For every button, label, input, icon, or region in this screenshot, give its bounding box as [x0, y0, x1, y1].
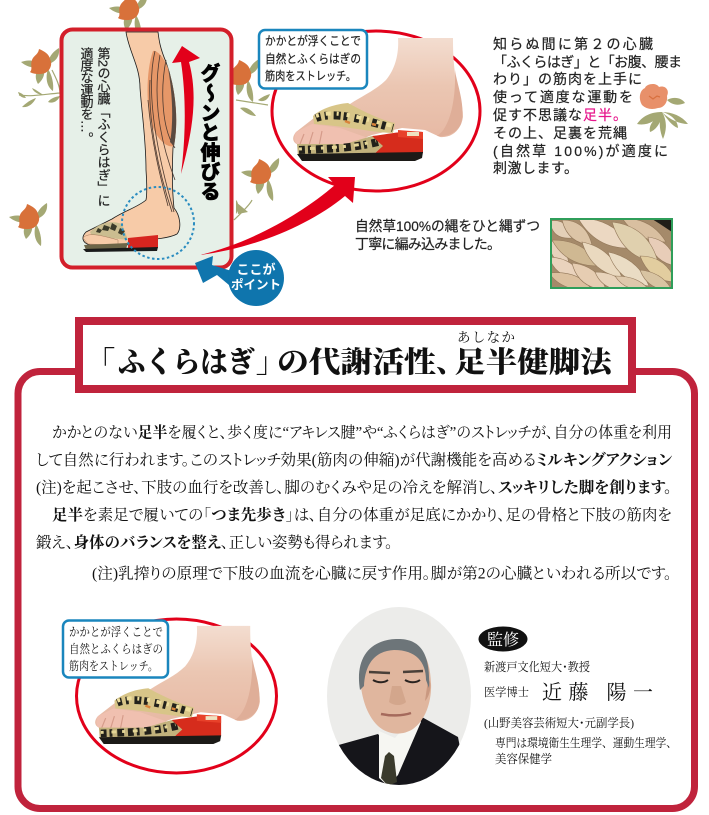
text: supervisor profile: (山野美容芸術短大･元副学長): [484, 715, 634, 730]
text: supervisor profile: [484, 659, 677, 766]
big red arrow: [200, 177, 355, 255]
callout: stretch lower: かかとが浮くことで: [69, 625, 163, 639]
vertical caption: 第2の心臓「ふくらはぎ」に: [96, 46, 110, 207]
red stretch arrow: [172, 46, 200, 174]
decorative flowers: [9, 0, 279, 246]
text block: intro: その上、足裏を荒縄: [493, 125, 627, 141]
leg illustration: [83, 32, 180, 252]
text block: intro: 刺激します。: [493, 160, 578, 176]
text: supervisor profile: 美容保健学: [495, 751, 552, 766]
text block: intro: [493, 36, 682, 176]
vertical caption: [78, 46, 110, 207]
text: rope caption: 丁寧に編み込みました。: [355, 236, 501, 252]
heading banner: 足半健脚法: [454, 346, 616, 379]
callout: stretch lower: 筋肉をストレッチ。: [69, 659, 158, 673]
heading banner: あしなか: [457, 330, 515, 345]
text block: intro: 知らぬ間に第２の心臓: [493, 36, 653, 52]
text: supervisor profile: 近藤 陽一: [542, 681, 653, 704]
dotted circle highlight: [122, 187, 194, 259]
body text: して自然に行われます。このストレッチ効果(筋肉の伸縮)が代謝機能を高めるミルキングアクション: [36, 450, 672, 469]
body text: [36, 422, 672, 582]
body text: 足半を素足で履いての「つま先歩き」は、自分の体重が足底にかかり、足の骨格と下肢の筋肉を: [52, 505, 672, 524]
text block: intro: (自然草 100%)が適度に: [493, 143, 668, 159]
heading banner: 、: [436, 347, 465, 379]
text block: intro: わり」の筋肉を上手に: [493, 71, 642, 87]
portrait photo: [327, 607, 471, 800]
text block: intro: 促す不思議な足半。: [493, 107, 627, 123]
badge: point here: ポイント: [231, 277, 281, 292]
heading banner: 「: [86, 346, 115, 379]
text: rope caption: 自然草100%の縄をひと縄ずつ: [355, 218, 540, 234]
icon: flower and bamboo: [637, 84, 688, 139]
panel: main card: [18, 321, 694, 808]
red ellipse with foot photo: [272, 31, 480, 191]
heading banner: 」: [256, 347, 285, 379]
heading banner: ふくらはぎ: [118, 346, 255, 379]
text: supervisor profile: 医学博士: [484, 685, 529, 699]
heading banner: [79, 321, 632, 389]
callout: stretch lower: 自然とふくらはぎの: [69, 642, 163, 656]
heading banner: の代謝活性: [277, 346, 436, 379]
badge: supervision: 監修: [487, 631, 519, 649]
callout: stretch: かかとが浮くことで: [265, 33, 361, 48]
vertical headline: グ〜ンと伸びる: [197, 62, 220, 201]
text block: intro: 「ふくらはぎ」と「お腹、腰ま: [493, 54, 682, 70]
vertical caption: 適度な運動を…。: [78, 47, 94, 145]
badge: point here: [195, 250, 284, 306]
callout: stretch: [259, 30, 367, 88]
body text: 鍛え、身体のバランスを整え、正しい姿勢も得られます。: [36, 532, 393, 552]
panel: calf diagram: [62, 30, 232, 268]
text block: intro: 使って適度な運動を: [493, 89, 633, 105]
foot photo in circle: [76, 619, 276, 773]
callout: stretch: 筋肉をストレッチ。: [265, 68, 356, 83]
text: rope caption: [355, 218, 540, 252]
sandal small: [83, 222, 158, 252]
callout: stretch: 自然とふくらはぎの: [265, 51, 361, 66]
body text: (注)乳搾りの原理で下肢の血流を心臓に戻す作用。脚が第2の心臓といわれる所以です。: [92, 564, 672, 582]
text: supervisor profile: 新渡戸文化短大･教授: [484, 659, 590, 674]
badge: point here: ここが: [236, 262, 276, 277]
badge: supervision: [478, 626, 528, 652]
body text: かかとのない足半を履くと、歩く度に“アキレス腱”や“ふくらはぎ”のストレッチが、自分の体重を利用: [52, 422, 672, 442]
photo: straw rope: [549, 218, 676, 290]
body text: (注)を起こさせ、下肢の血行を改善し、脚のむくみや足の冷えを解消し、スッキリした脚を創ります。: [36, 478, 672, 496]
callout: stretch lower: [63, 620, 168, 678]
text: supervisor profile: 専門は環境衛生生理学、運動生理学、: [495, 735, 677, 750]
